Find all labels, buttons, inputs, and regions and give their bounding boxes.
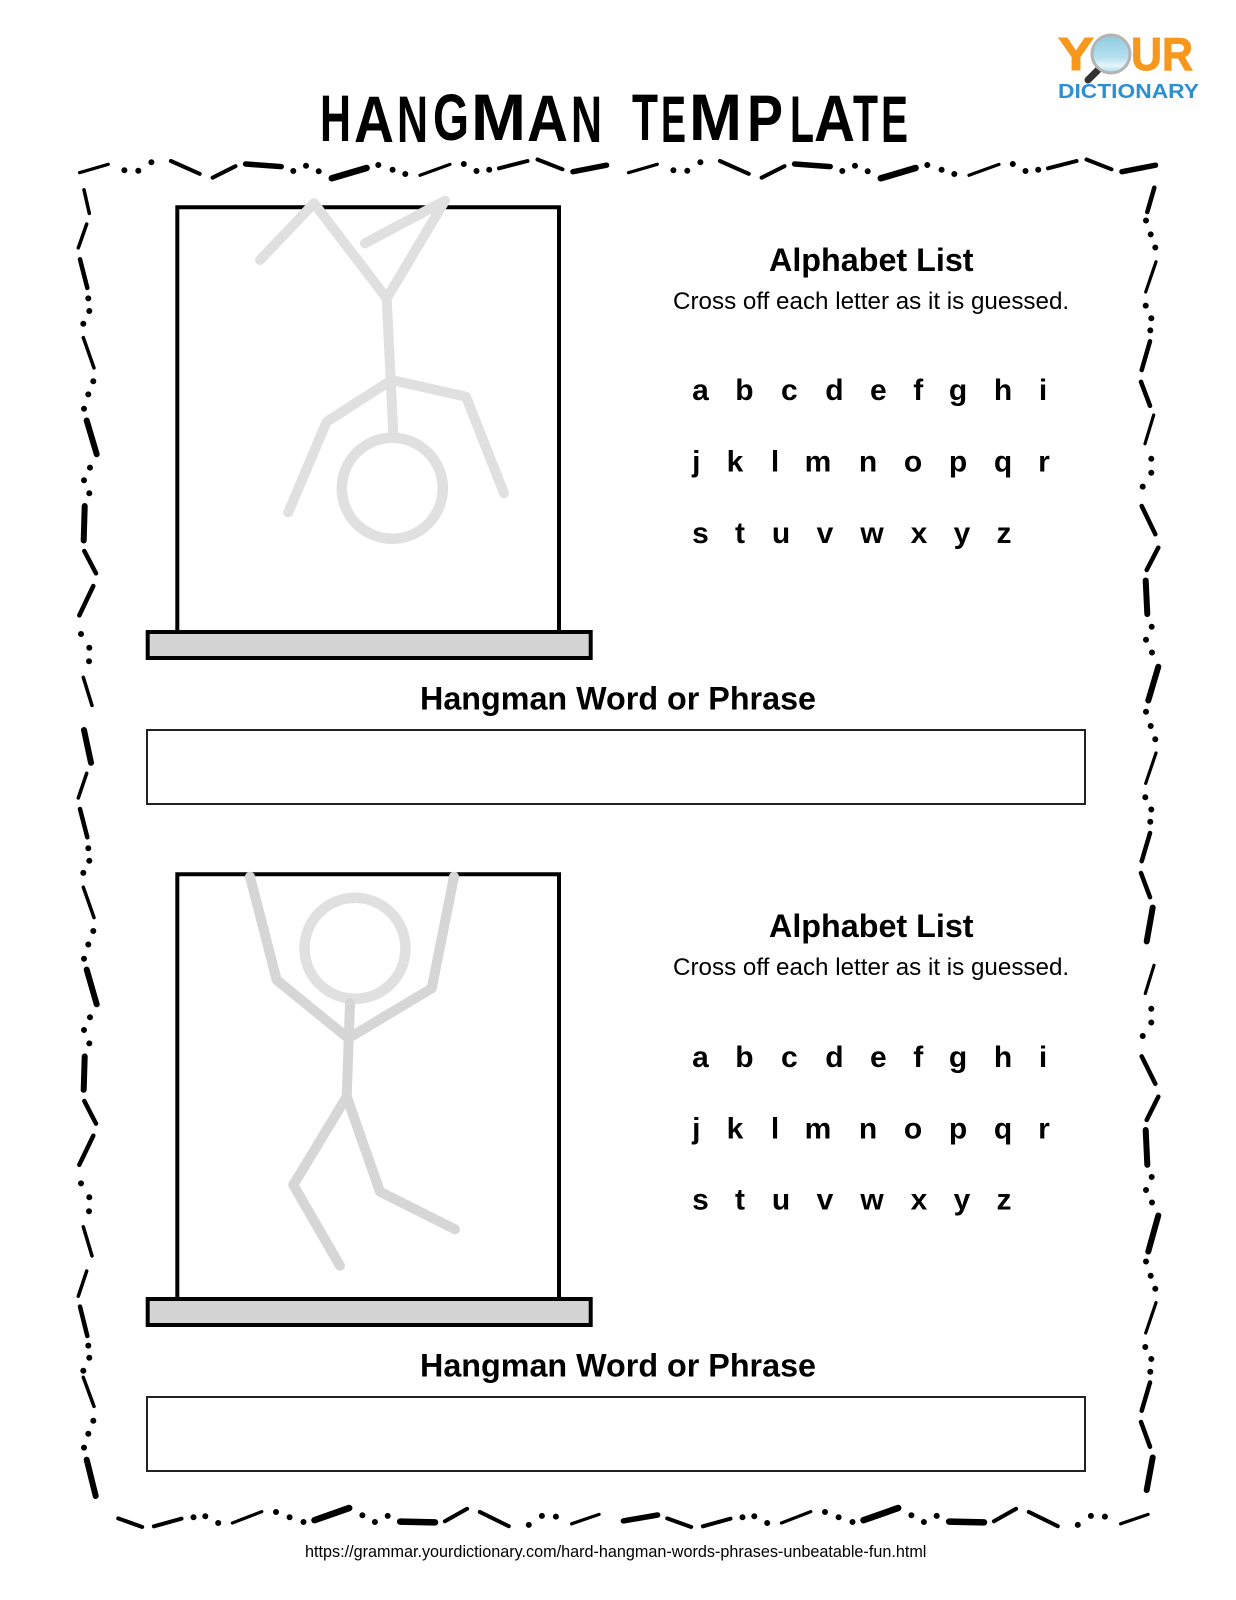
panel: first game	[147, 201, 1085, 804]
gallows frame	[177, 207, 559, 632]
title: P	[747, 81, 783, 155]
title: E	[881, 82, 908, 156]
icon: magnifying glass	[1088, 35, 1130, 80]
title: N	[397, 82, 428, 156]
source url: https://grammar.yourdictionary.com/hard-hangman-words-phrases-unbeatable-fun.html	[305, 1543, 926, 1561]
border: bottom edge	[118, 1508, 1148, 1527]
decorative dashed border frame	[78, 160, 1158, 1527]
alphabet list heading: Alphabet List	[769, 908, 974, 944]
hanging stick figure	[250, 877, 455, 1266]
word or phrase heading: Hangman Word or Phrase	[420, 680, 816, 716]
alphabet letters: stuvwxyz	[692, 517, 1012, 550]
alphabet list instruction: Cross off each letter as it is guessed.	[673, 954, 1069, 981]
alphabet letters: jklmnopqr	[691, 446, 1050, 478]
alphabet letters: abcdefghi	[692, 374, 1047, 407]
title: M	[689, 80, 742, 154]
logo word: YOUR	[1058, 28, 1193, 80]
alphabet letters	[691, 374, 1050, 550]
title: M	[471, 80, 526, 154]
word or phrase answer box	[147, 730, 1085, 804]
logo: YourDictionary	[1058, 28, 1200, 103]
gallows frame	[177, 874, 559, 1299]
alphabet letters: jklmnopqr	[691, 1112, 1050, 1146]
border: top edge	[80, 160, 1156, 178]
upside-down stick figure	[260, 201, 504, 539]
title: T	[853, 81, 878, 155]
alphabet list instruction: Cross off each letter as it is guessed.	[673, 288, 1069, 315]
word or phrase answer box	[147, 1397, 1085, 1471]
gallows base	[148, 632, 591, 658]
alphabet letters: abcdefghi	[692, 1041, 1047, 1074]
alphabet list heading: Alphabet List	[769, 242, 974, 278]
border: right edge	[1141, 188, 1158, 1490]
title: A	[354, 82, 394, 156]
panel: second game	[147, 874, 1085, 1471]
title: N	[571, 82, 602, 156]
title: A	[527, 81, 568, 155]
title: T	[632, 80, 658, 154]
logo word: YOUR: UR	[1131, 28, 1193, 80]
border: left edge	[78, 190, 97, 1496]
logo word: DICTIONARY: DICTIONARY	[1058, 81, 1200, 103]
title	[320, 80, 908, 156]
logo word: YOUR: Y	[1058, 28, 1094, 80]
title: G	[433, 80, 469, 154]
alphabet letters: stuvwxyz	[692, 1184, 1012, 1216]
title: H	[320, 81, 351, 155]
alphabet letters	[691, 1041, 1050, 1216]
gallows base	[148, 1299, 591, 1325]
title: E	[661, 82, 686, 156]
title: A	[814, 81, 855, 155]
title: L	[790, 82, 814, 156]
word or phrase heading: Hangman Word or Phrase	[420, 1348, 816, 1384]
